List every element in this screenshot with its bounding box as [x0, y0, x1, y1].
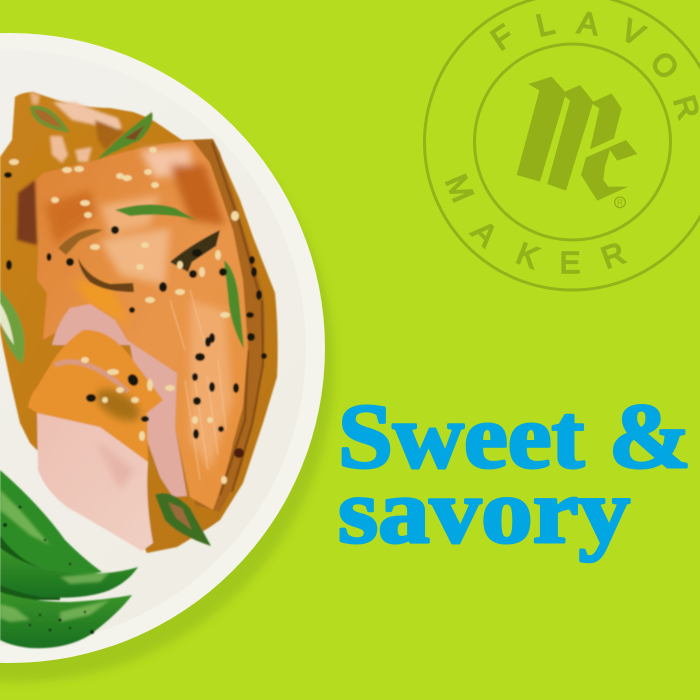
badge lettering: F — [485, 18, 520, 57]
pepper specks — [3, 506, 94, 634]
plate well — [0, 50, 306, 646]
badge lettering: A — [465, 214, 504, 253]
badge lettering: K — [512, 235, 544, 276]
McCormick Mc monogram: R — [617, 198, 623, 208]
badge lettering: A — [576, 5, 601, 42]
plate rim — [0, 33, 325, 663]
flesh tone patches — [45, 148, 232, 470]
shading on pink meat — [95, 440, 135, 490]
badge lettering — [438, 5, 700, 280]
scallion: bottom — [155, 493, 211, 546]
front slice pink meat — [37, 413, 153, 551]
scallion: top left ring — [32, 108, 66, 130]
pea pod: upper — [0, 470, 102, 575]
plate shadow — [0, 50, 334, 682]
sauce reflections — [30, 92, 125, 163]
flesh grain lines — [170, 290, 226, 480]
outer ring — [424, 0, 700, 290]
pea pod: lower — [0, 592, 132, 648]
scallion: centre — [115, 204, 196, 220]
badge lettering: O — [643, 45, 686, 86]
pink slice behind — [52, 304, 187, 497]
plate — [0, 33, 325, 663]
badge lettering: R — [597, 235, 630, 276]
fish flesh — [33, 141, 248, 510]
sauce pool — [0, 92, 278, 553]
scallion: right — [224, 260, 244, 349]
logo badge: Flavor Maker — [424, 0, 700, 290]
badge lettering: E — [560, 245, 580, 280]
dark skin streaks — [212, 142, 263, 495]
front slice crease — [55, 362, 128, 392]
badge lettering: V — [615, 12, 650, 53]
badge lettering: L — [533, 5, 557, 43]
white sesame seeds — [9, 147, 239, 484]
McCormick Mc monogram — [517, 77, 637, 208]
glaze shine on slice — [91, 383, 145, 427]
headline line 2: savory — [338, 460, 630, 562]
snap peas — [0, 470, 138, 648]
black sesame seeds — [4, 172, 267, 458]
front slice upper glaze — [28, 330, 163, 462]
headline line 1: Sweet & — [338, 385, 691, 487]
badge lettering: M — [438, 169, 481, 207]
dark glazed scallions — [58, 229, 220, 292]
dark shadow between pods — [0, 525, 60, 600]
pea pod: middle — [0, 548, 138, 598]
dark fish shoulder — [17, 180, 37, 245]
headline: Sweet & savory — [338, 385, 691, 562]
inner ring — [474, 44, 670, 240]
scallion: top — [97, 112, 152, 160]
scallion: left edge — [0, 288, 25, 364]
pea highlights — [0, 490, 110, 622]
fish skin edge — [190, 139, 265, 512]
glazed fish and pork dish — [0, 92, 278, 553]
